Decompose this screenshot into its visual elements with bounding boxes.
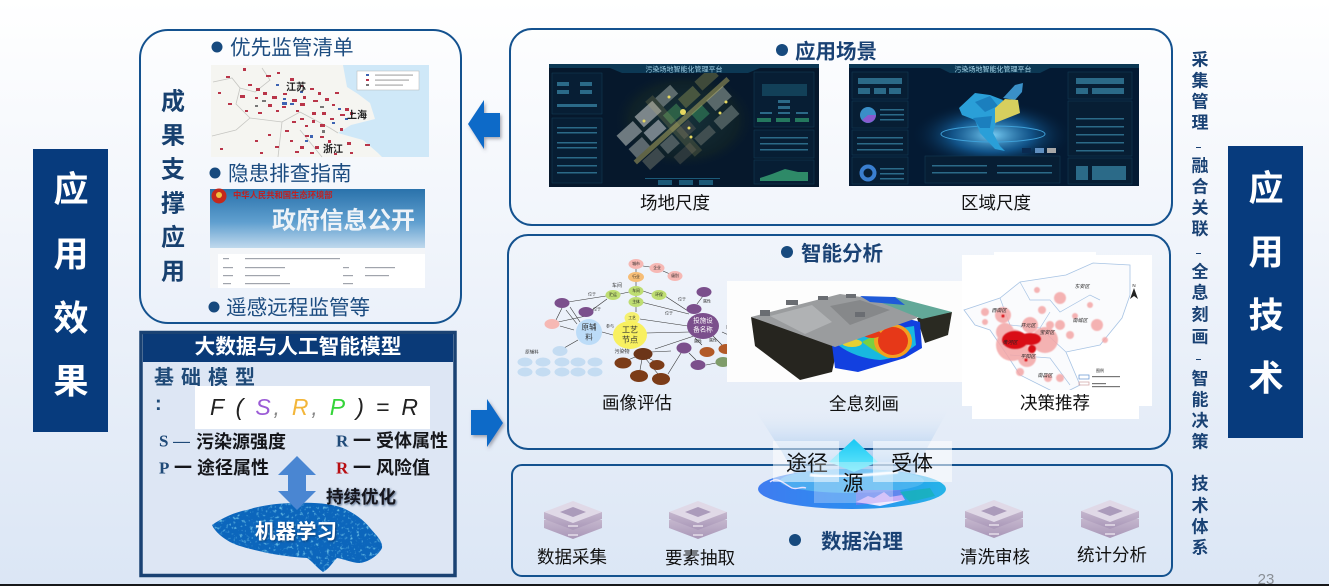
graph nodes: 城市 <box>632 261 640 266</box>
side text: technology system: 理 <box>1192 114 1208 132</box>
image: government disclosure page: 中华人民共和国生态环境部 <box>233 190 333 200</box>
side text: technology system: 画 <box>1192 328 1208 346</box>
list item: priority list: 优先监管清单 <box>230 36 354 60</box>
list item: remote sensing: 遥感远程监管等 <box>226 296 370 320</box>
dashboard: site scale <box>549 50 819 189</box>
map: priority sites: 浙江 <box>323 142 343 156</box>
panel: application scenarios <box>510 29 1172 225</box>
heading: 成果支撑应用: 成 <box>161 88 185 116</box>
graph nodes: 车间 <box>632 288 640 293</box>
north arrow <box>1130 283 1138 299</box>
map: priority sites <box>211 65 429 157</box>
heat map legend <box>1079 367 1120 387</box>
map: priority sites: 上海 <box>347 108 367 122</box>
graph edge labels: 位于 <box>665 310 673 316</box>
side text: technology system: 术 <box>1192 496 1208 516</box>
subheading: base model: : <box>155 393 162 415</box>
heat map image: 西南区 <box>991 307 1007 314</box>
knowledge graph <box>518 259 747 385</box>
graph nodes <box>518 259 747 385</box>
caption: data collection: 数据采集 <box>537 547 607 567</box>
graph nodes: 工艺 <box>622 326 638 334</box>
side text: technology system: 关 <box>1192 198 1208 218</box>
dashboard: regional scale <box>849 64 1139 186</box>
heading: 成果支撑应用: 用 <box>161 258 185 286</box>
left label: 应用效果: 效 <box>53 300 89 338</box>
graph edge labels: 污染物 <box>614 348 630 355</box>
text: machine learning: 机器学习 <box>255 520 337 544</box>
side text: technology system: 能 <box>1192 390 1208 410</box>
box: source <box>814 462 893 503</box>
graph nodes: 环保 <box>655 292 663 297</box>
bottom toolbar <box>645 178 720 185</box>
side text: technology system: 决 <box>1192 412 1208 430</box>
side text: technology system: 联 <box>1192 220 1208 238</box>
box: pathway: 途径 <box>786 452 828 476</box>
icon: up pyramid <box>829 439 878 472</box>
side text: technology system: 采 <box>1192 50 1208 70</box>
glowing regional map <box>912 83 1072 169</box>
side text: technology system: 刻 <box>1192 304 1208 324</box>
right label: 应用技术: 应 <box>1248 170 1284 208</box>
side text: technology system: 息 <box>1192 282 1208 302</box>
heading: 成果支撑应用: 果 <box>161 122 185 150</box>
brain image <box>212 503 382 572</box>
side text: technology system: 策 <box>1192 432 1208 452</box>
formula: F ( S, R, P ) = R <box>210 394 418 420</box>
definition: R risk: R <box>336 458 349 478</box>
side text: technology system: 全 <box>1192 262 1208 282</box>
formula <box>195 386 430 429</box>
subheading: base model: 基础模型 <box>154 366 262 389</box>
heat map legend: 图例 <box>1096 367 1104 373</box>
caption: regional scale: 区域尺度 <box>961 193 1031 213</box>
graph nodes: 级别 <box>671 273 679 278</box>
graph edge labels: 属性 <box>726 324 734 330</box>
heat map image: 开元区 <box>1020 323 1036 329</box>
left label: 应用效果: 用 <box>53 236 89 274</box>
graph edge labels: 位于 <box>593 306 601 312</box>
definition: R receptor: R <box>336 432 349 450</box>
image: government disclosure page <box>210 188 425 288</box>
left label: 应用效果: 果 <box>53 362 89 402</box>
definition: S <box>159 432 286 452</box>
map: priority sites: 江苏 <box>286 80 306 94</box>
image: government disclosure page: 政府信息公开 <box>272 208 415 234</box>
text: continuous optimisation: 持续优化 <box>326 487 396 507</box>
side text: technology system: 合 <box>1192 176 1208 196</box>
graph edge labels: 位于 <box>588 290 596 296</box>
heading: 应用场景: 应用场景 <box>795 40 877 64</box>
heading: 成果支撑应用 <box>161 88 185 286</box>
side text: technology system: 系 <box>1192 538 1208 558</box>
graph nodes: 行业 <box>632 274 640 279</box>
panel: results support <box>140 30 461 323</box>
graph edge labels: 车间 <box>612 282 622 289</box>
caption: site scale: 场地尺度 <box>640 193 710 213</box>
right label: 应用技术: 术 <box>1248 360 1284 398</box>
caption: decision recommendation: 决策推荐 <box>1020 393 1090 413</box>
icon: data stack 3 <box>965 500 1023 538</box>
caption: cleaning and review: 清洗审核 <box>960 547 1030 567</box>
right data panels <box>754 72 814 184</box>
graph edge labels: 属性 <box>694 338 702 344</box>
side text: technology system: 融 <box>1192 156 1208 176</box>
graph edges <box>556 266 733 374</box>
box: receptor: 受体 <box>891 452 933 476</box>
graph nodes: 工艺 <box>628 315 636 320</box>
side text: technology system: 体 <box>1192 518 1208 536</box>
panel: big data and AI model <box>141 332 455 576</box>
heading: 数据治理: 数据治理 <box>821 530 903 554</box>
graph nodes: 节点 <box>622 336 638 344</box>
emblem <box>212 188 226 204</box>
caption: profile assessment: 画像评估 <box>602 393 672 413</box>
graph nodes: 备名称 <box>693 324 713 334</box>
heading: 成果支撑应用: 应 <box>161 224 185 252</box>
left label: 应用效果: 应 <box>53 170 89 210</box>
box: source: 源 <box>842 472 864 496</box>
definition: P: 一 途径属性 <box>174 457 269 478</box>
left data panels <box>552 73 602 183</box>
arrow: left to results <box>468 100 500 149</box>
definition: S: 污染源强度 <box>196 432 286 452</box>
dashboard: regional scale: 污染场地智能化管理平台 <box>954 64 1032 74</box>
definition: R receptor: 一 受体属性 <box>353 430 448 451</box>
heat map image: 南昌区 <box>1037 372 1053 379</box>
side charts <box>852 72 1132 184</box>
north arrow: N <box>1132 283 1136 288</box>
side text: technology system: 集 <box>1192 70 1208 90</box>
arrow: right to analysis <box>471 399 503 447</box>
right label: 应用技术: 用 <box>1248 234 1284 272</box>
dashboard: site scale: 污染场地智能化管理平台 <box>646 64 722 74</box>
list item: hazard guide: 隐患排查指南 <box>228 162 352 186</box>
definition: S: S <box>159 432 168 450</box>
heat map image: 黄河区 <box>1002 339 1018 346</box>
graph nodes: 料 <box>585 332 593 342</box>
graph edge labels <box>588 282 734 355</box>
caption: statistical analysis: 统计分析 <box>1077 545 1147 565</box>
heading: 成果支撑应用: 撑 <box>161 190 185 218</box>
icon: data stack 4 <box>1081 500 1139 538</box>
box: pathway <box>773 441 839 482</box>
side text: technology system: 技 <box>1192 474 1208 494</box>
graph edge labels: 属性 <box>709 336 717 342</box>
side text: technology system: 管 <box>1192 92 1208 112</box>
panel: data governance <box>512 465 1172 576</box>
left label: 应用效果 <box>33 149 108 432</box>
source-pathway-receptor platform <box>758 439 952 509</box>
caption: holographic portrayal: 全息刻画 <box>829 394 899 414</box>
map legend <box>357 71 419 90</box>
right label: 应用技术 <box>1228 146 1303 438</box>
panel: intelligent analysis <box>508 235 1170 449</box>
definition: S: — <box>173 432 190 450</box>
definition: R risk: 一 风险值 <box>353 457 430 478</box>
caption: decision recommendation <box>972 390 1139 419</box>
definition: P: P <box>159 458 169 478</box>
graph edge labels: 属性 <box>703 298 711 304</box>
double arrow <box>278 456 316 510</box>
funnel light beam <box>755 410 948 475</box>
heading: 智能分析: 智能分析 <box>801 242 883 266</box>
heat map image <box>962 252 1152 406</box>
graph nodes: 投施设 <box>693 316 713 324</box>
platform disc <box>758 469 946 509</box>
box: receptor <box>873 441 952 482</box>
3D model image <box>727 281 962 382</box>
graph edge labels: 参与 <box>606 322 614 328</box>
side text: technology system: 智 <box>1192 368 1208 388</box>
right label: 应用技术: 技 <box>1248 296 1284 336</box>
subheading: base model <box>154 366 262 415</box>
heat map image: 平阳区 <box>1020 353 1036 360</box>
heat map image: 东安区 <box>1074 283 1090 290</box>
heat map image: 南城区 <box>1072 317 1088 324</box>
model header: 大数据与人工智能模型 <box>195 336 401 358</box>
aerial site view <box>610 50 756 189</box>
graph edge labels: 位于 <box>678 296 686 302</box>
graph nodes: 原辅料 <box>525 348 539 356</box>
model header <box>143 334 453 362</box>
graph nodes: 原辅 <box>582 322 597 332</box>
graph nodes: 主体 <box>632 299 640 304</box>
icon: data stack 1 <box>544 501 602 539</box>
graph nodes: 企业 <box>653 265 661 270</box>
side text: technology system <box>1192 50 1208 558</box>
heading: 成果支撑应用: 支 <box>161 156 185 184</box>
icon: data stack 2 <box>669 501 727 539</box>
graph nodes: 贮运 <box>609 292 617 297</box>
heat map image: 宝安区 <box>1039 329 1055 336</box>
caption: feature extraction: 要素抽取 <box>665 548 735 568</box>
